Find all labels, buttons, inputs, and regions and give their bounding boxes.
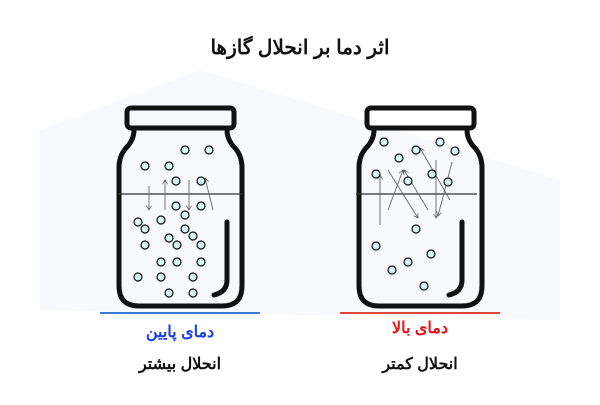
jar: right [356,108,482,306]
title: اثر دما بر انحلال گازها [210,37,390,59]
label: high temperature: دمای بالا [392,320,448,337]
baseline: red [340,312,500,314]
baseline: blue [100,312,260,314]
jar: left [118,108,243,306]
label: low temperature: دمای پایین [146,324,214,341]
label: less dissolution: انحلال کمتر [382,356,458,373]
label: more dissolution: انحلال بیشتر [139,356,221,373]
